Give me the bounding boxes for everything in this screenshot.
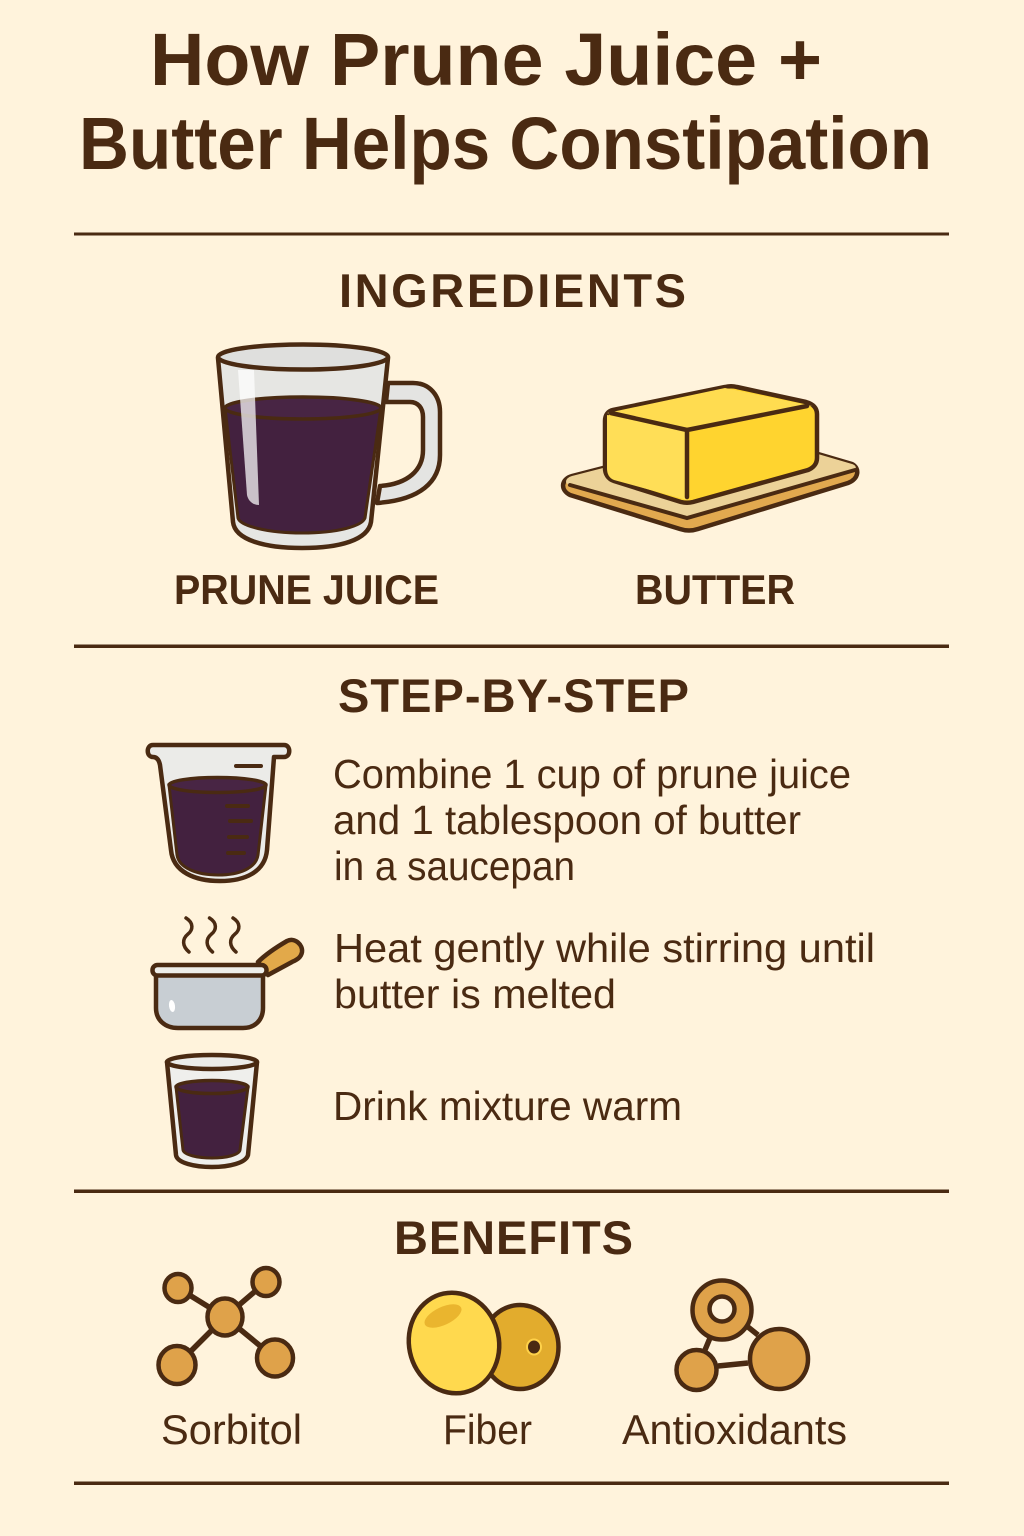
text: step 3: Drink mixture warm [333, 1083, 682, 1129]
heading: ingredients: INGREDIENTS [339, 264, 686, 317]
icon: measuring cup [148, 745, 289, 881]
icon: butter on dish [563, 386, 857, 530]
text: step 1: in a saucepan [334, 843, 575, 889]
text: step 1: and 1 tablespoon of butter [333, 797, 801, 843]
panel: ingredients [174, 344, 857, 613]
icon: glass of juice [167, 1055, 257, 1167]
text: step 1: Combine 1 cup of prune juice [333, 751, 851, 797]
panel: steps [148, 745, 875, 1167]
label: antioxidants: Antioxidants [622, 1406, 847, 1453]
heading: benefits: BENEFITS [394, 1211, 633, 1264]
label: sorbitol: Sorbitol [161, 1406, 302, 1453]
text: step 2: Heat gently while stirring until [334, 925, 875, 971]
icon: saucepan with steam [152, 918, 302, 1028]
label: butter: BUTTER [635, 566, 795, 613]
icon: mug of prune juice [218, 344, 440, 548]
title [79, 18, 932, 185]
panel: benefits [158, 1268, 847, 1453]
text: step 1 [333, 751, 851, 889]
label: prune juice: PRUNE JUICE [174, 566, 439, 613]
title: How Prune Juice + [150, 18, 822, 101]
heading: step-by-step: STEP-BY-STEP [338, 669, 689, 722]
icon: sorbitol molecule [158, 1268, 293, 1384]
label: fiber: Fiber [443, 1406, 532, 1453]
icon: antioxidants [676, 1280, 808, 1390]
title: Butter Helps Constipation [79, 102, 932, 185]
text: step 2: butter is melted [334, 971, 616, 1017]
text: step 2 [334, 925, 875, 1017]
icon: fiber [399, 1284, 558, 1402]
